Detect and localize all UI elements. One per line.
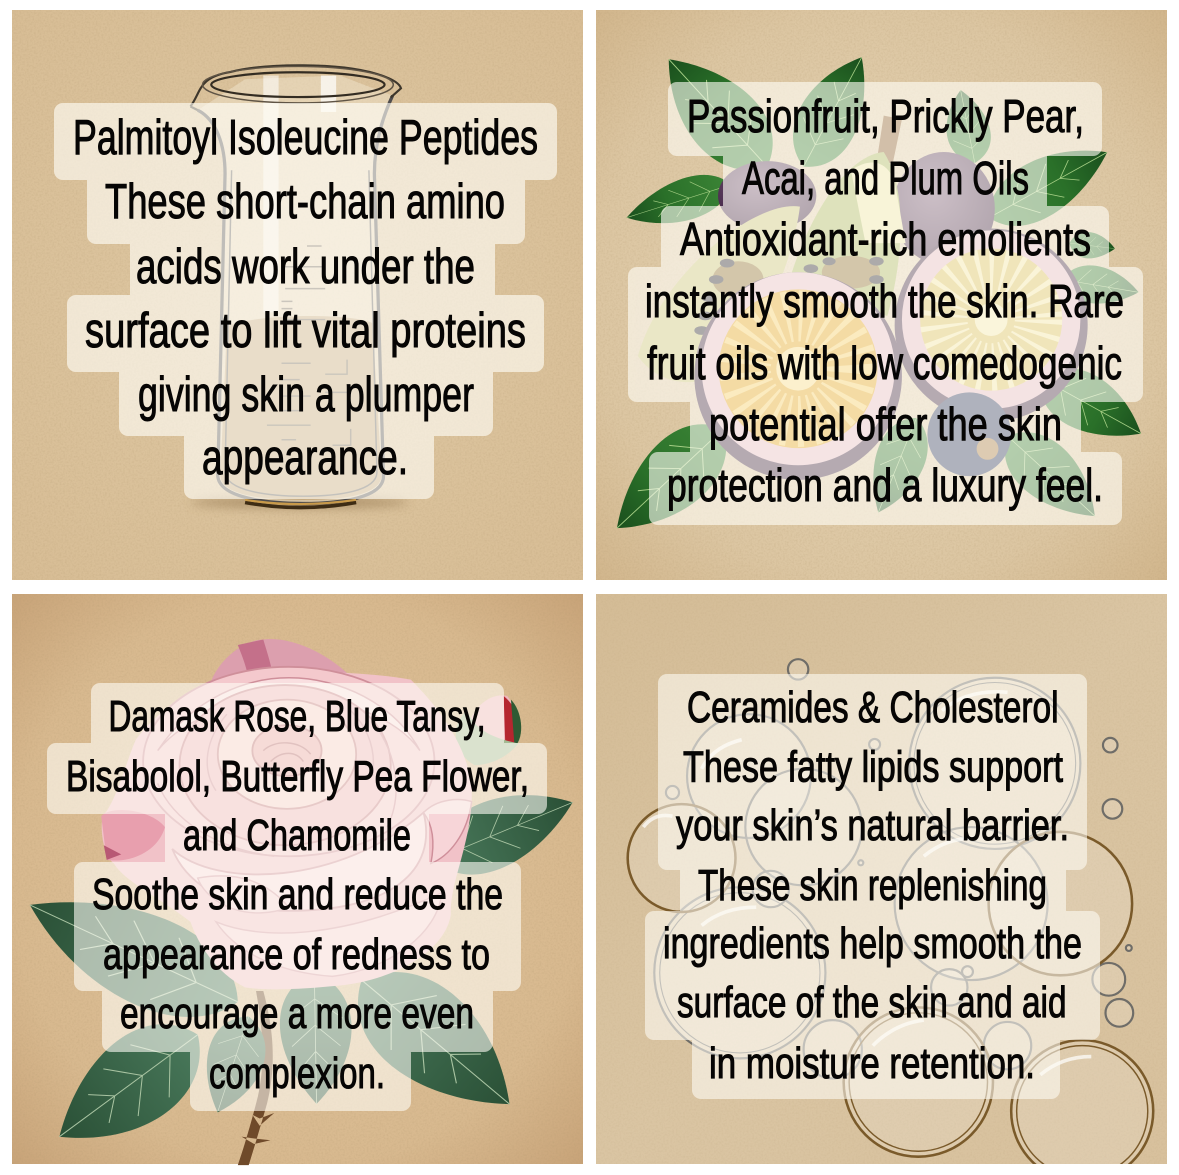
body text: These short-chain amino	[105, 175, 505, 229]
text highlight background	[645, 674, 1100, 1099]
text highlight background	[47, 683, 547, 1111]
stem	[876, 116, 902, 163]
heading: palmitoyl isoleucine peptides: Palmitoyl Isoleucine Peptides	[73, 111, 538, 165]
illustration: glass beaker	[190, 65, 409, 508]
heading: damask rose, blue tansy, bisabolol, butterfly pea flower and chamomile: and Chamomile	[183, 811, 411, 860]
body text: potential offer the skin	[709, 398, 1062, 450]
body text: complexion.	[209, 1049, 385, 1098]
panel background	[596, 10, 1167, 580]
heading: ceramides and cholesterol: Ceramides & Cholesterol	[687, 683, 1058, 732]
body text: surface of the skin and aid	[677, 978, 1066, 1027]
text highlight background	[628, 82, 1143, 525]
body text: surface to lift vital proteins	[85, 304, 526, 358]
bud	[456, 695, 521, 765]
panel background	[12, 10, 583, 580]
body text: appearance of redness to	[103, 930, 490, 979]
body text: giving skin a plumper	[138, 368, 474, 422]
text highlight background	[54, 103, 557, 499]
body text	[645, 213, 1124, 511]
body text: encourage a more even	[120, 989, 474, 1038]
heading: damask rose, blue tansy, bisabolol, butterfly pea flower and chamomile: Bisabolol, Butterfly Pea Flower,	[66, 752, 529, 801]
illustration: oil bubbles	[628, 659, 1153, 1175]
acai berry	[927, 392, 1011, 476]
body text	[85, 175, 526, 485]
body text: acids work under the	[136, 240, 475, 294]
stem	[238, 991, 274, 1165]
panel: ceramides and cholesterol	[596, 594, 1167, 1175]
panel: fruit oils	[594, 10, 1167, 580]
illustration: passionfruit, plum, acai and leaves	[594, 35, 1155, 553]
passionfruit halves	[895, 229, 1088, 422]
heading: passionfruit, prickly pear, acai and plum oils	[687, 90, 1084, 204]
panel background	[12, 594, 583, 1164]
seeds	[694, 257, 884, 335]
illustration: pink rose with leaves	[10, 639, 586, 1172]
body text	[92, 870, 503, 1098]
body text: appearance.	[202, 431, 408, 485]
panel: palmitoyl isoleucine peptides	[12, 10, 583, 580]
plums	[893, 152, 995, 265]
rose petals	[101, 639, 472, 989]
body text: These fatty lipids support	[683, 742, 1063, 792]
panel: rose and soothing botanicals	[10, 594, 586, 1172]
body text: your skin’s natural barrier.	[676, 801, 1069, 850]
split fruit	[638, 206, 800, 382]
heading: damask rose, blue tansy, bisabolol, butterfly pea flower and chamomile	[66, 692, 529, 860]
heading: damask rose, blue tansy, bisabolol, butterfly pea flower and chamomile: Damask Rose, Blue Tansy,	[108, 692, 486, 741]
body text: Soothe skin and reduce the	[92, 870, 503, 919]
body text: in moisture retention.	[709, 1039, 1035, 1088]
leaves	[594, 35, 1155, 553]
body text	[663, 742, 1082, 1088]
leaves	[10, 771, 586, 1172]
body text: These skin replenishing	[698, 861, 1047, 910]
panel background	[596, 594, 1167, 1164]
heading: passionfruit, prickly pear, acai and plum oils: Acai, and Plum Oils	[742, 152, 1029, 204]
